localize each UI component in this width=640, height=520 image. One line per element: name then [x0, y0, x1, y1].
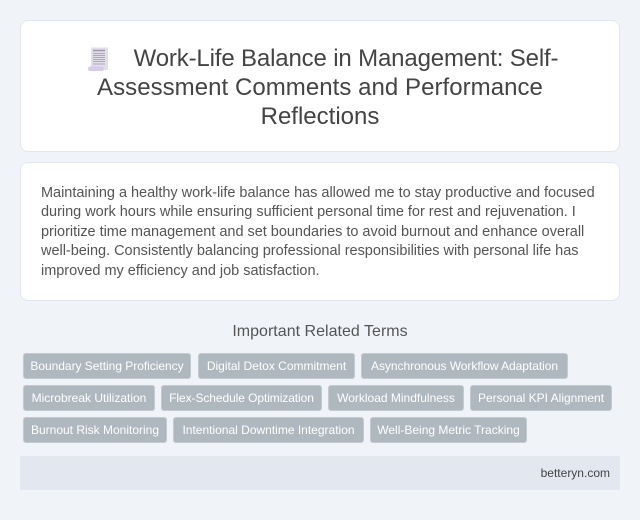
chip: microbreak — [23, 385, 155, 411]
chip: well-being metric: Well-Being Metric Tracking — [377, 423, 520, 437]
chip: personal KPI: Personal KPI Alignment — [478, 391, 604, 405]
chip: intentional downtime — [173, 417, 364, 443]
title: Work-Life Balance in Management: Self- — [134, 45, 558, 72]
title — [97, 45, 558, 130]
chip: asynchronous workflow: Asynchronous Workflow Adaptation — [371, 359, 558, 373]
chip: intentional downtime: Intentional Downtime Integration — [182, 423, 355, 437]
panel: self-assessment text card — [20, 162, 620, 301]
text block: self-assessment comment: during work hours while ensuring sufficient personal time for rest and rejuvenation. I — [41, 204, 576, 220]
chip: asynchronous workflow — [361, 353, 568, 379]
title: Assessment Comments and Performance — [97, 74, 543, 101]
chip: burnout risk: Burnout Risk Monitoring — [31, 423, 159, 437]
chip: burnout risk — [23, 417, 167, 443]
footer: site name: betteryn.com — [541, 466, 610, 480]
chip: flex-schedule — [161, 385, 322, 411]
chip: digital detox — [198, 353, 355, 379]
chip: microbreak: Microbreak Utilization — [32, 391, 146, 405]
chip: personal KPI — [470, 385, 612, 411]
panel: title card — [20, 20, 620, 152]
chip: digital detox: Digital Detox Commitment — [207, 359, 346, 373]
chip: boundary setting: Boundary Setting Proficiency — [30, 359, 184, 373]
heading: important related terms: Important Related Terms — [232, 323, 408, 340]
icon: paper scroll — [88, 48, 108, 71]
chip: workload mindfulness — [328, 385, 464, 411]
text block: self-assessment comment: Maintaining a healthy work-life balance has allowed me to stay productive and focused — [41, 184, 595, 200]
chip: workload mindfulness: Workload Mindfulness — [337, 391, 455, 405]
chip: flex-schedule: Flex-Schedule Optimization — [169, 391, 314, 405]
text block: self-assessment comment: well-being. Consistently balancing professional responsibilities with personal life has — [41, 243, 578, 259]
text block: self-assessment comment: prioritize time management and set boundaries to avoid burnout and enhance overall — [41, 224, 584, 240]
text block: self-assessment comment: improved my efficiency and job satisfaction. — [41, 262, 320, 278]
chip: well-being metric — [370, 417, 527, 443]
chip: boundary setting — [23, 353, 191, 379]
title: Reflections — [261, 103, 379, 130]
text block: self-assessment comment — [41, 184, 595, 278]
footer bar — [20, 456, 620, 490]
